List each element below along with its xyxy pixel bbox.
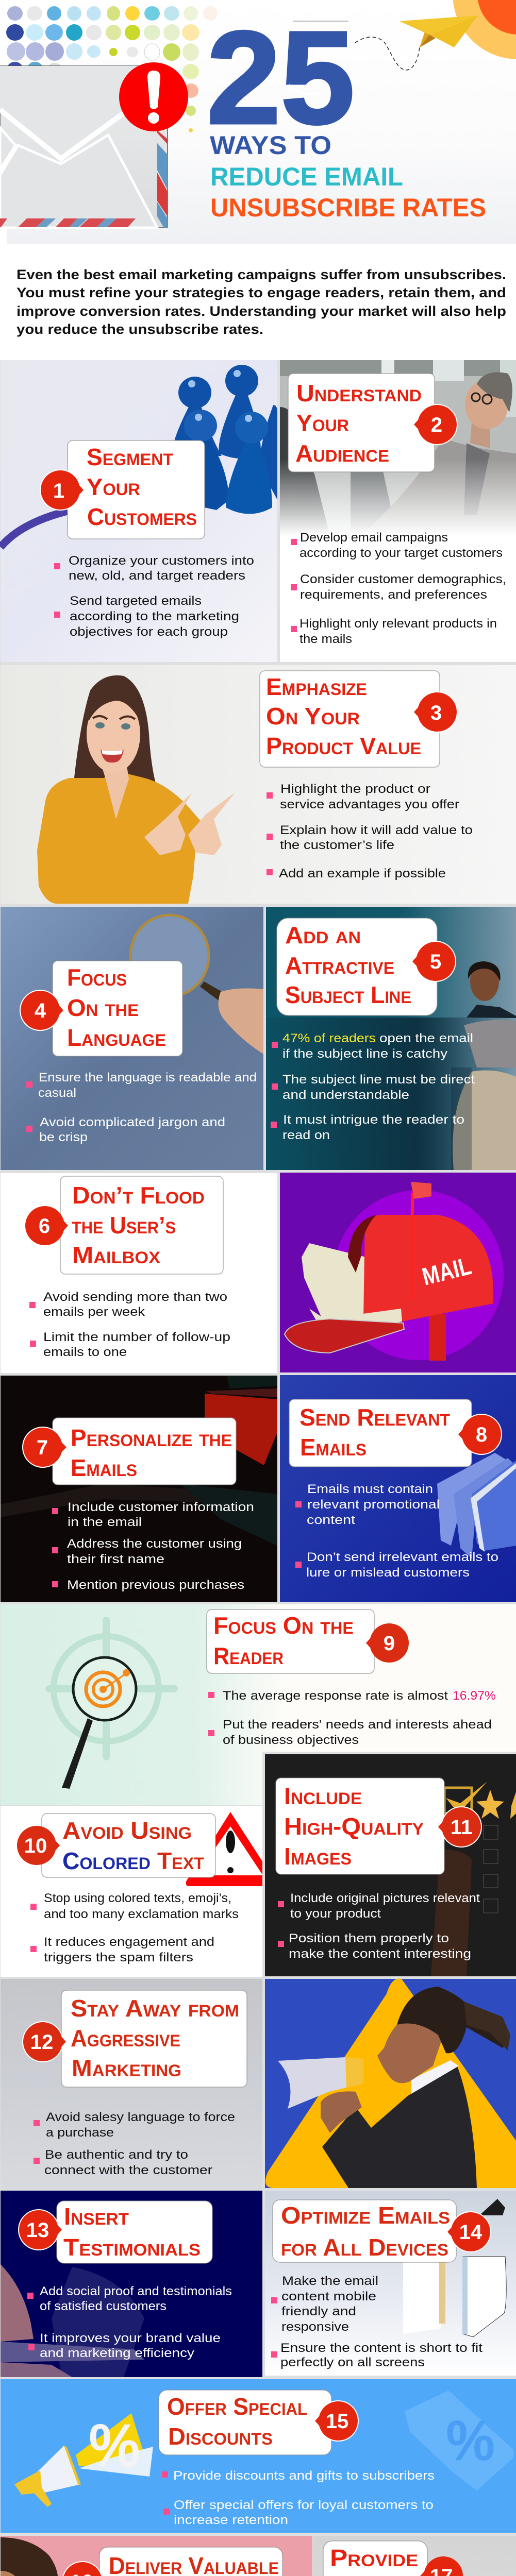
card heading [277, 918, 437, 1015]
icon: smartphones [403, 2199, 506, 2337]
bullet list: the customer’s life [280, 838, 394, 852]
number badge 3 [414, 691, 458, 733]
card heading: for All Devices [281, 2234, 448, 2261]
bullet list [267, 782, 473, 880]
card heading: Mailbox [72, 1242, 161, 1268]
card heading [276, 1778, 444, 1874]
card heading: Language [67, 1024, 166, 1051]
card heading: Subject Line [285, 981, 411, 1008]
icon: envelope [0, 66, 168, 228]
bullet list: connect with the customer [44, 2163, 212, 2177]
bullet list: Address the customer using [67, 1537, 242, 1551]
icon: ghost discount tag [405, 2391, 513, 2490]
icon: megaphone with percent [14, 2412, 153, 2507]
bullet list: relevant promotional [307, 1498, 440, 1512]
bullet list: Highlight only relevant products in [299, 617, 497, 631]
bullet list: Explain how it will add value to [280, 823, 473, 837]
icon: paper plane [400, 15, 478, 47]
photo: woman holding book [1, 2537, 102, 2576]
bullet list: Mention previous purchases [67, 1578, 244, 1592]
bullet list: Stop using colored texts, emoji’s, [44, 1891, 231, 1905]
bullet list: of business objectives [223, 1733, 359, 1747]
bullet list: Be authentic and try to [45, 2148, 188, 2162]
bullet list: service advantages you offer [280, 798, 459, 811]
bullet list: Organize your customers into [69, 554, 254, 568]
card heading: Insert [64, 2203, 129, 2230]
panel: send relevant emails [280, 1375, 516, 1602]
card heading: Emails [300, 1434, 367, 1461]
card heading [273, 2200, 456, 2262]
bullet list [34, 2110, 235, 2177]
header banner [0, 0, 516, 244]
bullet list: Don’t send irrelevant emails to [307, 1550, 498, 1564]
number badge 5: 5 [430, 951, 441, 973]
bullet list: the mails [299, 632, 352, 646]
bullet list: if the subject line is catchy [282, 1047, 447, 1061]
number badge 14 [447, 2211, 491, 2252]
bullet list [27, 2284, 232, 2360]
number badge 13 [18, 2209, 62, 2250]
card heading [60, 1176, 223, 1274]
bullet list [278, 1891, 480, 1961]
card heading: Your [87, 473, 140, 500]
bullet list: The average response rate is almost [223, 1689, 448, 1703]
bullet list: emails to one [43, 1345, 127, 1359]
icon: target under magnifier [49, 1620, 174, 1789]
intro paragraph: You must refine your strategies to engage readers, retain them, and [16, 285, 506, 300]
panel: emphasize on your product value [1, 665, 516, 904]
panel: focus on the language [1, 907, 263, 1170]
bullet list: lure or mislead customers [306, 1566, 470, 1580]
bullet list [162, 2469, 435, 2527]
bullet list: friendly and [281, 2304, 356, 2318]
number badge 12: 12 [30, 2031, 53, 2054]
card heading: Include [284, 1783, 362, 1809]
number badge 16 [62, 2561, 106, 2576]
bullet list: perfectly on all screens [280, 2355, 425, 2369]
bullet list: Emails must contain [307, 1482, 433, 1496]
card heading: Emails [71, 1454, 137, 1481]
title lines: WAYS TO [210, 131, 331, 160]
bullet list: Avoid complicated jargon and [40, 1115, 225, 1129]
intro paragraph: improve conversion rates. Understanding your market will also help [16, 303, 506, 319]
card heading: Discounts [168, 2423, 273, 2450]
card heading [57, 2201, 212, 2263]
card heading: Attractive [285, 952, 394, 979]
panel: mailbox image [280, 1173, 516, 1372]
panel: avoid using colored text [1, 1806, 278, 1977]
bullet list: according to the marketing [70, 609, 239, 623]
card heading: Text [157, 1848, 204, 1874]
card heading: Focus On the [213, 1612, 354, 1639]
panel: megaphone man image [265, 1978, 516, 2188]
photo: businessman in office [280, 360, 516, 536]
card heading: Focus [67, 964, 127, 991]
bullet list: requirements, and preferences [300, 588, 487, 602]
card heading: Send Relevant [299, 1404, 450, 1431]
card heading [68, 440, 205, 539]
number badge 12 [22, 2021, 66, 2062]
bullet list: Consider customer demographics, [300, 572, 506, 586]
card heading [260, 671, 440, 767]
bullet list: Highlight the product or [280, 782, 430, 796]
bullet list: casual [38, 1086, 76, 1100]
bullet list: be crisp [39, 1130, 88, 1144]
bullet list: content [307, 1513, 355, 1527]
card heading [53, 1418, 236, 1485]
bullet list [271, 1031, 475, 1142]
bullet list: Include customer information [68, 1500, 254, 1514]
number badge 11: 11 [451, 1816, 472, 1839]
photo: pointing woman in yellow [37, 675, 235, 904]
icon: sun [453, 0, 516, 59]
card heading: Marketing [72, 2055, 181, 2081]
card heading: Optimize Emails [281, 2202, 450, 2229]
bullet list: Put the readers' needs and interests ahead [223, 1718, 492, 1732]
bullet list: Avoid salesy language to force [46, 2110, 235, 2124]
bullet list: to your product [290, 1907, 381, 1921]
bullet list: Send targeted emails [70, 594, 202, 608]
number badge 2: 2 [431, 414, 442, 436]
panel: personalize the emails [1, 1376, 277, 1602]
card heading: High-Quality [284, 1813, 424, 1840]
icon: warning triangle [186, 1812, 278, 1886]
bullet list: and marketing efficiency [40, 2346, 194, 2360]
title lines [210, 131, 486, 222]
panel: insert testimonials [1, 2191, 262, 2377]
card heading: Avoid Using [62, 1817, 192, 1844]
bullet list: make the content interesting [289, 1947, 471, 1961]
card heading: Images [284, 1843, 352, 1870]
bullet list: and too many exclamation marks [44, 1907, 239, 1921]
card heading [323, 2541, 427, 2576]
panel: don't flood the user's mailbox [1, 1173, 277, 1373]
card heading: Personalize the [71, 1425, 232, 1451]
number badge 17 [420, 2556, 463, 2576]
bullet list: read on [282, 1128, 330, 1142]
card heading [288, 374, 435, 472]
card heading [61, 1990, 247, 2087]
card heading: Segment [87, 444, 173, 470]
card heading [42, 1814, 215, 1877]
photo: blue pawns [171, 365, 277, 514]
icon: colored dots [6, 6, 218, 132]
bullet list: responsive [281, 2320, 349, 2334]
number badge 7: 7 [37, 1436, 48, 1459]
bullet list [29, 1290, 230, 1359]
number badge 1 [40, 469, 84, 511]
bullet list: Develop email campaigns [300, 531, 448, 545]
number badge 4 [20, 990, 63, 1031]
bullet list: Make the email [282, 2274, 378, 2288]
title number 25: 25 [207, 4, 355, 151]
bullet list: objectives for each group [70, 625, 228, 639]
bullet list [208, 1689, 496, 1747]
number badge 9: 9 [384, 1632, 395, 1655]
icon: red mailbox: MAIL [420, 1252, 474, 1291]
bullet list: in the email [68, 1515, 142, 1529]
bullet list [291, 531, 506, 646]
bullet list: open the email [379, 1031, 473, 1045]
bullet list: Add an example if possible [279, 867, 446, 880]
bullet list: new, old, and target readers [69, 569, 245, 583]
number badge 1: 1 [53, 480, 64, 502]
card heading: Add an [285, 922, 361, 948]
photo: magnifying glass and hand [130, 915, 263, 1054]
card heading: Audience [295, 440, 389, 467]
panel: provide freebies [313, 2536, 516, 2576]
number badge 15: 15 [326, 2410, 348, 2433]
bullet list [54, 554, 254, 639]
card heading: Don’t Flood [72, 1182, 205, 1209]
card heading: the User’s [72, 1212, 176, 1239]
bullet list: It reduces engagement and [44, 1935, 214, 1949]
number badge 13: 13 [26, 2219, 49, 2242]
card heading: Customers [87, 503, 197, 530]
number badge 15 [315, 2400, 359, 2442]
icon: ghost discount tag: % [446, 2409, 495, 2472]
card heading: Testimonials [63, 2234, 201, 2261]
bullet list: content mobile [281, 2290, 376, 2303]
icon: red envelope on dark background [1, 1376, 277, 1546]
photo: writing hand [1, 2264, 144, 2377]
card heading: Aggressive [71, 2025, 180, 2052]
icon: rating stars and hand [431, 1782, 516, 1976]
bullet list: a purchase [46, 2126, 114, 2140]
panel: stay away from aggressive marketing [1, 1979, 262, 2190]
card heading: Offer Special [167, 2393, 307, 2420]
number badge 14: 14 [459, 2221, 482, 2244]
number badge 9 [366, 1623, 409, 1663]
bullet list: Offer special offers for loyal customers to [174, 2498, 434, 2512]
photo: man shouting into megaphone [278, 1987, 510, 2188]
bullet list: Avoid sending more than two [43, 1290, 227, 1304]
panel: segment your customers [1, 360, 277, 662]
panel: focus on the reader [1, 1604, 516, 1805]
bullet list: emails per week [43, 1305, 145, 1319]
bullet list: of satisfied customers [40, 2299, 167, 2313]
icon: red alert circle [119, 62, 188, 131]
number badge 3: 3 [430, 702, 442, 724]
bullet list [26, 1071, 257, 1144]
intro paragraph: Even the best email marketing campaigns suffer from unsubscribes. [16, 267, 506, 282]
card heading: Your [296, 410, 349, 436]
bullet list: Ensure the language is readable and [39, 1071, 257, 1084]
bullet list: 16.97% [453, 1689, 496, 1703]
title lines: REDUCE EMAIL [210, 162, 403, 191]
bullet list: according to your target customers [299, 546, 503, 560]
bullet list [52, 1500, 254, 1592]
card heading [207, 1609, 374, 1673]
bullet list: and understandable [282, 1088, 409, 1102]
icon: megaphone with percent: % [89, 2412, 140, 2480]
panel: understand your audience [280, 360, 516, 662]
panel: optimize emails for all devices [265, 2191, 516, 2376]
bullet list: their first name [67, 1552, 164, 1566]
panel: deliver valuable content [1, 2536, 312, 2576]
bullet list [30, 1891, 239, 1964]
panel: include high-quality images [262, 1752, 516, 1977]
card heading: On the [67, 994, 139, 1021]
arrow: purple swoosh [1, 511, 68, 547]
number badge 2 [414, 404, 458, 445]
number badge 11 [438, 1806, 482, 1848]
title lines: UNSUBSCRIBE RATES [210, 193, 486, 222]
bullet list: It improves your brand value [40, 2331, 221, 2345]
bullet list: Provide discounts and gifts to subscribers [173, 2469, 435, 2483]
bullet list: triggers the spam filters [44, 1951, 193, 1964]
card heading: On Your [266, 703, 360, 730]
intro paragraph: you reduce the unsubscribe rates. [16, 321, 263, 337]
icon: red mailbox [285, 1182, 493, 1361]
number badge 6 [25, 1206, 68, 1245]
bullet list: Position them properly to [289, 1931, 449, 1945]
number badge 5 [412, 941, 456, 982]
bullet list: The subject line must be direct [282, 1073, 475, 1087]
card heading: Reader [213, 1642, 284, 1669]
number badge 10: 10 [24, 1835, 47, 1857]
number badge 10 [17, 1826, 60, 1865]
card heading: Emphasize [266, 673, 367, 700]
bullet list: 47% of readers [282, 1031, 376, 1045]
intro paragraph [16, 267, 506, 337]
number badge 8 [458, 1414, 502, 1455]
card heading: Product Value [266, 733, 421, 759]
number badge 8: 8 [476, 1423, 487, 1446]
bullet list [271, 2274, 482, 2369]
card heading: Colored [62, 1848, 151, 1874]
card heading [289, 1399, 472, 1467]
bullet list [295, 1482, 498, 1580]
card heading [53, 961, 182, 1056]
bullet list: It must intrigue the reader to [283, 1113, 464, 1127]
card heading: Understand [296, 380, 422, 406]
number badge 7 [22, 1427, 66, 1468]
panel: offer special discounts [1, 2379, 516, 2533]
bullet list: Limit the number of follow-up [43, 1330, 230, 1344]
bullet list: Ensure the content is short to fit [280, 2341, 482, 2355]
arrow: dashed flight path [355, 37, 420, 70]
card heading [159, 2390, 331, 2455]
number badge 6: 6 [39, 1215, 50, 1238]
photo: woman with laptop [266, 961, 516, 1170]
panel: add an attractive subject line [266, 907, 516, 1170]
card heading: Provide [330, 2545, 418, 2571]
bullet list: Include original pictures relevant [290, 1891, 480, 1905]
number badge 4: 4 [35, 999, 46, 1022]
bullet list: increase retention [174, 2513, 288, 2527]
icon: blue envelopes [437, 1453, 516, 1558]
card heading: Stay Away from [71, 1995, 239, 2022]
bullet list: Add social proof and testimonials [40, 2284, 232, 2298]
